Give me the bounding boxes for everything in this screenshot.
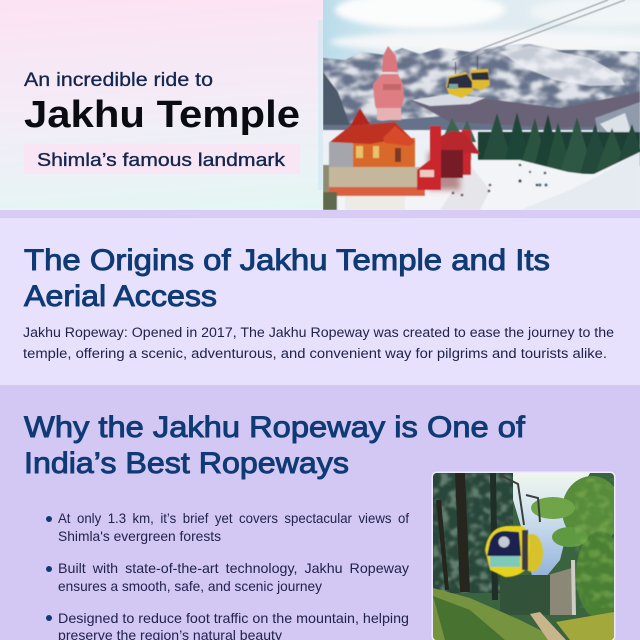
hero image left fade (318, 20, 323, 190)
sky and clouds (323, 0, 640, 75)
ropeway cables (452, 0, 625, 60)
bullet: length: At only 1.3 km, it’s brief yet covers spectacular views of (58, 510, 409, 526)
red temple gate (417, 126, 480, 190)
bullet: length: Shimla's evergreen forests (58, 528, 221, 544)
why heading: Why the Jakhu Ropeway is One of (24, 411, 526, 444)
photo: cable car in forest (432, 472, 624, 640)
bullet: conservation (46, 610, 409, 640)
bullet: technology: Built with state-of-the-art technology, Jakhu Ropeway (58, 560, 409, 576)
yellow cable car (485, 526, 543, 577)
cable arm and tower (500, 475, 540, 525)
bullet: technology: ensures a smooth, safe, and scenic journey (58, 578, 322, 594)
snow ground (323, 152, 640, 210)
bullet: conservation: Designed to reduce foot traffic on the mountain, helping (58, 610, 409, 626)
snow mountains (323, 44, 640, 140)
hero panel (0, 0, 640, 210)
pine forest (442, 112, 640, 174)
hero subtitle: An incredible ride to (24, 69, 213, 91)
why heading (24, 411, 526, 480)
origins paragraph: Jakhu Ropeway: Opened in 2017, The Jakhu Ropeway was created to ease the journey to the (23, 325, 614, 340)
forest backdrop (433, 473, 624, 640)
temple base wall (323, 165, 425, 210)
divider band (0, 210, 640, 218)
temple building (329, 108, 415, 167)
bullet: technology (46, 560, 409, 594)
grassy slope (433, 588, 614, 640)
deity statue (373, 46, 404, 120)
bullet: length (46, 510, 409, 544)
hero title: Jakhu Temple (24, 94, 300, 136)
landmark tag: Shimla’s famous landmark (37, 149, 286, 170)
origins paragraph (23, 325, 614, 361)
cable cars (446, 56, 490, 98)
panel: why best ropeway (0, 385, 640, 640)
origins heading: Aerial Access (24, 280, 217, 313)
panel: origins (0, 218, 640, 385)
origins paragraph: temple, offering a scenic, adventurous, and convenient way for pilgrims and tourists alike. (23, 346, 607, 361)
hero illustration: Jakhu ropeway collage (323, 0, 640, 210)
landmark tag (24, 144, 300, 174)
why heading: India’s Best Ropeways (24, 447, 349, 480)
origins heading: The Origins of Jakhu Temple and Its (24, 244, 550, 277)
origins heading (24, 244, 550, 313)
